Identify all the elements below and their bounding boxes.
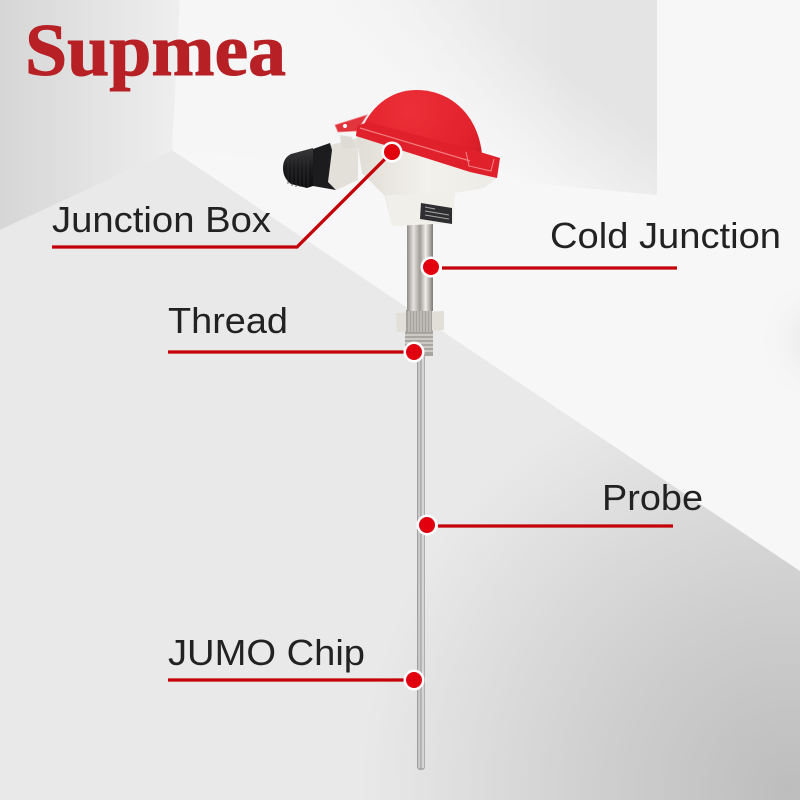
leader: Probe: Probe [602,477,703,518]
red dome [364,90,482,154]
latch [335,115,367,132]
leader: Probe [416,477,703,536]
leader: Thread: Thread [168,300,288,341]
leader: Junction Box: Junction Box [52,199,271,240]
thermocouple product photo [283,90,500,770]
threaded fitting [396,310,444,356]
logo: Supmea: Supmea [25,10,286,92]
probe rod [417,352,425,770]
leader: JUMO Chip: JUMO Chip [168,632,365,673]
cable gland [283,138,358,190]
leader: Cold Junction [420,215,781,278]
dome rim [356,122,500,178]
leader: Cold Junction: Cold Junction [550,215,781,256]
leader: JUMO Chip [168,632,424,690]
junction box body [356,134,497,226]
leader: Thread [168,300,424,362]
nameplate [420,203,452,224]
stem tube [407,222,433,311]
leader: Junction Box [52,142,402,247]
